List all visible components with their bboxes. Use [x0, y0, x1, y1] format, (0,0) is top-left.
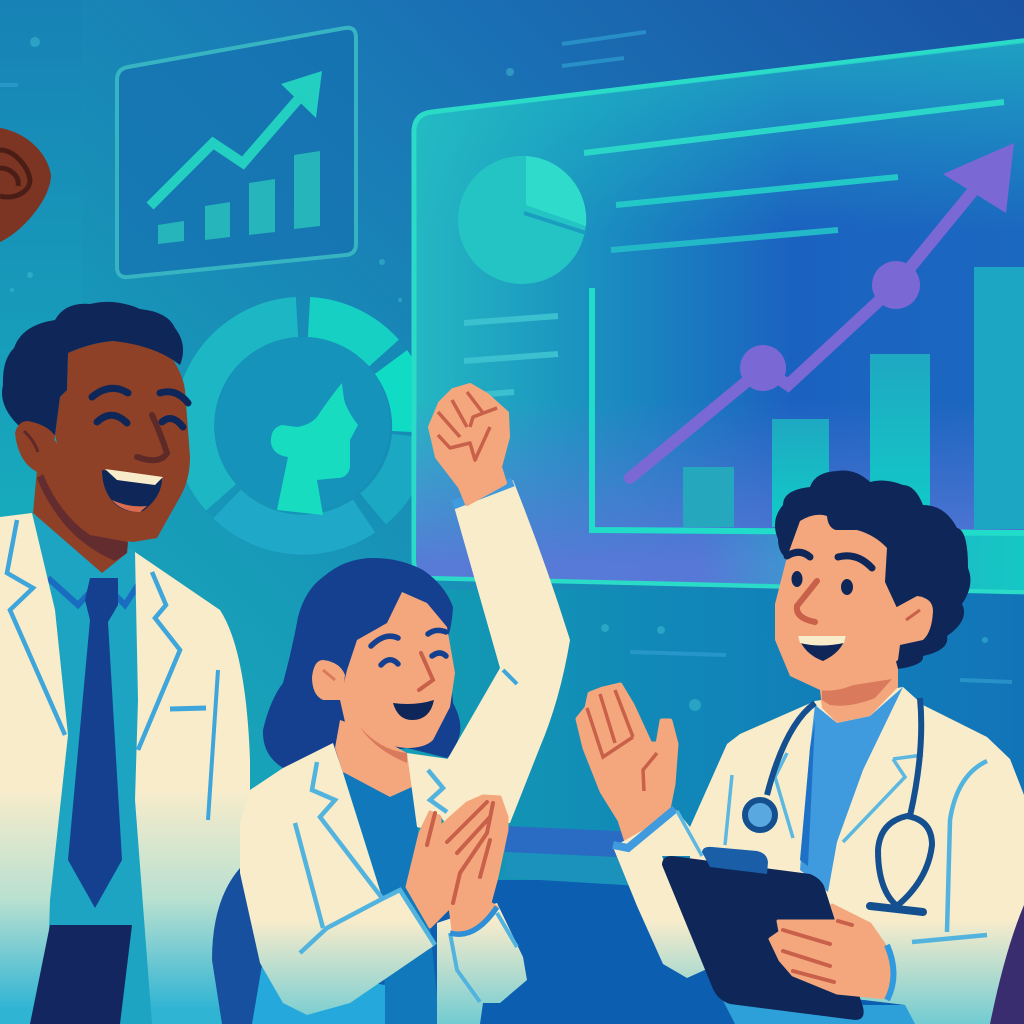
shirt	[800, 687, 903, 892]
text lines	[464, 102, 1004, 396]
clipboard	[662, 847, 864, 1020]
person: centre doctor	[212, 385, 570, 1024]
lab coat	[0, 513, 68, 1024]
nose	[419, 653, 433, 690]
eyes, brows	[371, 630, 446, 665]
edge of dark coat	[990, 905, 1024, 1024]
shirt	[343, 772, 440, 1024]
ear	[312, 660, 345, 700]
axes	[592, 288, 1024, 533]
ear	[15, 421, 55, 472]
neck	[820, 640, 898, 723]
hair back	[263, 558, 460, 768]
panel: growth chart card	[117, 28, 356, 277]
coat seams	[295, 762, 447, 953]
raised arm	[405, 480, 570, 830]
icon: partial fist at left edge	[0, 128, 51, 242]
raised hand	[578, 685, 676, 845]
lower shirt	[715, 985, 915, 1024]
hair	[2, 302, 183, 435]
icon: head silhouette	[271, 383, 358, 515]
lower glow	[700, 533, 1024, 590]
ear	[895, 596, 933, 645]
pie chart	[458, 156, 586, 284]
background wall panel	[0, 0, 82, 520]
background dashes	[0, 32, 1012, 682]
pocket	[170, 708, 206, 709]
coat body	[240, 743, 435, 1015]
coat lower front	[252, 965, 385, 1024]
tie	[68, 578, 122, 908]
purple glow	[416, 400, 1024, 590]
chair	[212, 868, 292, 1024]
holding hand	[770, 905, 893, 998]
floor	[190, 880, 1024, 1024]
face	[340, 592, 455, 748]
collar	[48, 578, 138, 605]
person: left doctor	[0, 302, 250, 1024]
top glow	[416, 42, 1024, 230]
arm	[613, 811, 707, 978]
mouth	[393, 700, 434, 720]
panel: main screen	[414, 40, 1024, 592]
background dots	[10, 37, 988, 711]
face	[775, 515, 900, 691]
coat torso	[690, 687, 1024, 1024]
nose	[137, 415, 167, 460]
lapels	[677, 753, 923, 856]
purple trend arrow	[630, 143, 1014, 478]
bars	[158, 151, 320, 244]
bars	[683, 267, 1024, 529]
face	[55, 341, 190, 542]
mouth	[102, 470, 162, 512]
lower wall	[414, 590, 1024, 890]
trend arrow	[150, 71, 322, 206]
neck	[33, 440, 128, 573]
shirt	[30, 515, 165, 1024]
neck	[335, 720, 412, 797]
person: right doctor	[578, 470, 1024, 1024]
raised fist	[430, 385, 508, 504]
brows and eyes	[92, 388, 188, 427]
lapels	[7, 520, 180, 750]
clapping hands	[407, 796, 507, 932]
hair	[775, 470, 970, 669]
belt and trousers	[30, 925, 132, 1024]
face details	[792, 571, 802, 587]
icon: stethoscope	[745, 698, 932, 912]
floor shelf	[505, 826, 640, 886]
panel: donut profile	[174, 297, 432, 555]
